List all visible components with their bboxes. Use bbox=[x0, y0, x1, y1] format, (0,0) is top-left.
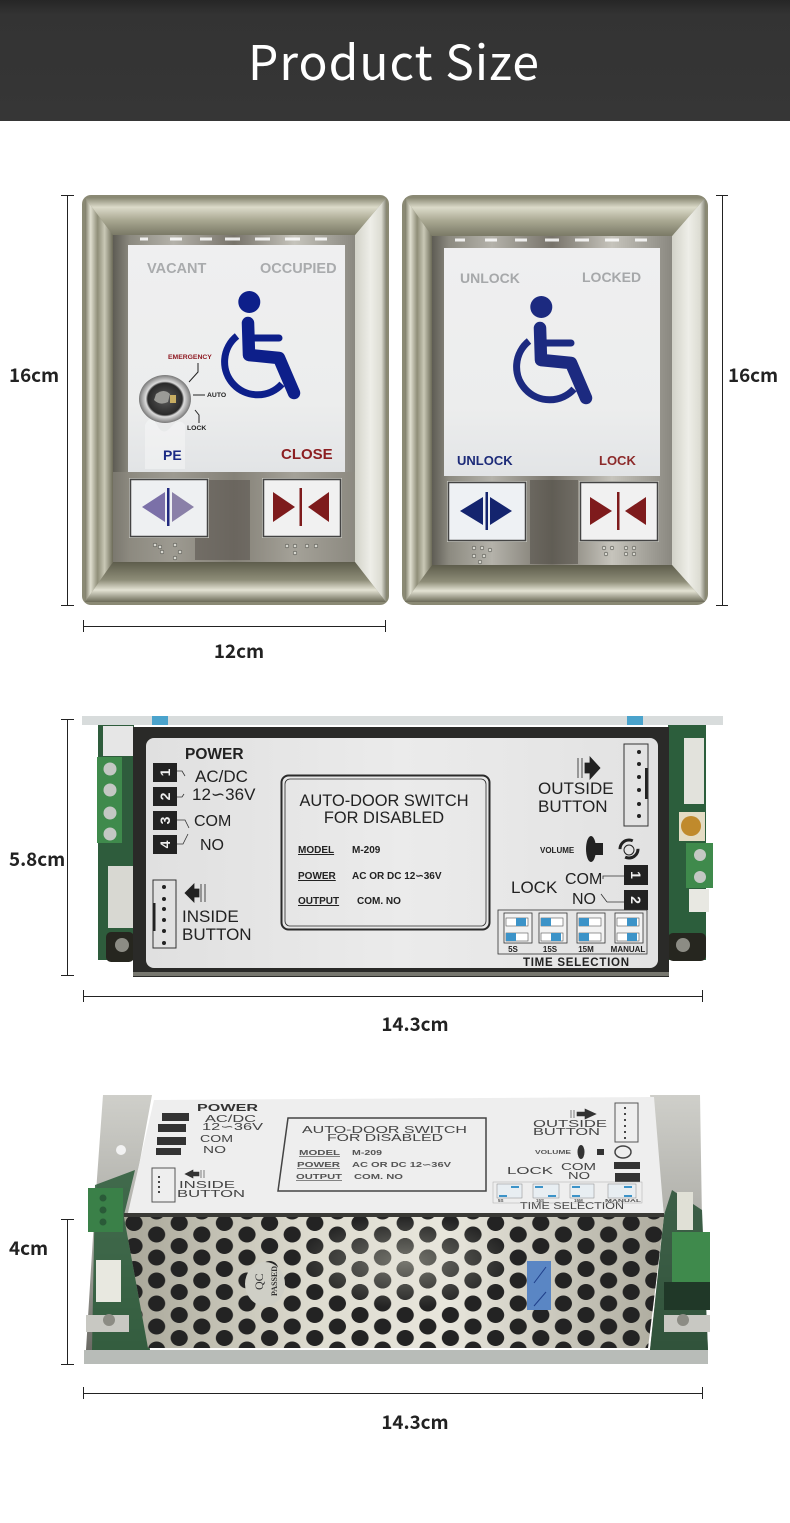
sticker: model box: OUTPUT bbox=[298, 896, 339, 907]
sticker text bbox=[152, 1103, 642, 1212]
sticker text: VOLUME bbox=[535, 1150, 572, 1156]
sticker text: NO bbox=[568, 1171, 590, 1182]
sticker: inside button connector: INSIDE bbox=[182, 907, 239, 926]
dimension: controller depth bbox=[61, 1219, 74, 1364]
dimension label: 16cm: 16cm bbox=[9, 361, 59, 388]
sticker: outside button connector: BUTTON bbox=[538, 797, 608, 816]
perforated metal cover bbox=[124, 1213, 664, 1348]
QC passed sticker: PASSED bbox=[270, 1266, 279, 1296]
sticker: model box: AUTO-DOOR SWITCH bbox=[299, 792, 469, 810]
label: UNLOCK blue: UNLOCK bbox=[457, 453, 513, 468]
blue label bbox=[527, 1261, 551, 1310]
sticker: power terminals: 4 bbox=[157, 840, 173, 848]
sticker: lock terminals: LOCK bbox=[511, 878, 558, 897]
sticker: lock terminals bbox=[511, 865, 648, 910]
dimension label: 4cm: 4cm bbox=[9, 1234, 48, 1261]
sticker text: POWER bbox=[297, 1162, 340, 1169]
dimension: controller width bbox=[83, 1387, 702, 1399]
sticker: inside button connector bbox=[153, 880, 252, 948]
sticker text: AC OR DC 12∽36V bbox=[352, 1162, 452, 1169]
label: EMERGENCY: EMERGENCY bbox=[168, 354, 212, 361]
label: VACANT: VACANT bbox=[147, 261, 206, 277]
sticker: power terminals: 3 bbox=[157, 816, 173, 824]
title: Product Size bbox=[248, 24, 540, 94]
button: close bbox=[262, 478, 342, 538]
sticker text: MANUAL bbox=[605, 1198, 641, 1203]
sticker: power terminals: 1 bbox=[157, 768, 173, 776]
label: LOCK red: LOCK bbox=[599, 453, 636, 468]
label: OCCUPIED: OCCUPIED bbox=[260, 261, 337, 277]
dimension: panel width bbox=[83, 620, 386, 632]
sticker: lock terminals: 1 bbox=[628, 871, 644, 879]
sticker: lock terminals: NO bbox=[572, 891, 596, 908]
sticker text: 5S bbox=[498, 1198, 504, 1203]
sticker text: MODEL bbox=[299, 1150, 341, 1157]
sticker text: OUTPUT bbox=[296, 1174, 343, 1181]
label: LOCKED: LOCKED bbox=[582, 269, 641, 285]
dimension label: 5.8cm: 5.8cm bbox=[9, 845, 65, 872]
icon: key lock bbox=[139, 354, 226, 432]
QC passed sticker: QC bbox=[252, 1273, 266, 1290]
sticker: power terminals: COM bbox=[194, 813, 231, 830]
button: lock bbox=[579, 481, 659, 542]
sticker: time selection switches: TIME SELECTION bbox=[523, 957, 629, 969]
label: AUTO: AUTO bbox=[207, 392, 226, 399]
photo: wall switch with key lock bbox=[82, 195, 389, 605]
braille dots bbox=[153, 543, 318, 560]
sticker: time selection switches: MANUAL bbox=[611, 945, 645, 954]
sticker text: INSIDE bbox=[179, 1180, 236, 1191]
sticker text: M-209 bbox=[352, 1150, 382, 1157]
sticker: outside button connector: OUTSIDE bbox=[538, 779, 614, 798]
dimension: controller height bbox=[61, 719, 74, 976]
sticker: lock terminals: COM bbox=[565, 871, 602, 888]
sticker text: AUTO-DOOR SWITCH bbox=[302, 1125, 467, 1136]
sticker: lock terminals: 2 bbox=[628, 896, 644, 904]
sticker: outside button connector bbox=[538, 744, 648, 826]
sticker: model box bbox=[282, 776, 490, 930]
sticker: time selection switches: 15S bbox=[543, 945, 558, 954]
sticker: power terminals: AC/DC bbox=[195, 767, 248, 786]
dimension label: 12cm: 12cm bbox=[214, 637, 264, 664]
sticker text: 15S bbox=[536, 1198, 544, 1203]
sticker text: NO bbox=[203, 1145, 226, 1156]
title banner bbox=[0, 0, 790, 121]
braille dots bbox=[472, 546, 636, 564]
dimension label: 14.3cm: 14.3cm bbox=[381, 1408, 449, 1435]
sticker: power terminals: 2 bbox=[157, 792, 173, 800]
label: UNLOCK: UNLOCK bbox=[460, 270, 520, 286]
sticker text: COM bbox=[561, 1162, 596, 1173]
sticker: time selection switches bbox=[498, 910, 647, 969]
dimension label: 16cm: 16cm bbox=[728, 361, 778, 388]
sticker: volume control: VOLUME bbox=[540, 846, 575, 855]
dimension: panel height right bbox=[716, 195, 728, 606]
sticker text: LOCK bbox=[507, 1166, 554, 1177]
dimension: panel height left bbox=[61, 195, 74, 606]
sticker: model box: COM. NO bbox=[357, 896, 401, 907]
label: LOCK: LOCK bbox=[187, 425, 206, 432]
sticker text: BUTTON bbox=[533, 1127, 600, 1138]
sticker text: 12∽36V bbox=[202, 1122, 264, 1133]
sticker text: FOR DISABLED bbox=[327, 1133, 443, 1144]
sticker: power terminals: 12∽36V bbox=[192, 785, 256, 804]
sticker text: AC/DC bbox=[205, 1114, 256, 1125]
label: CLOSE: CLOSE bbox=[281, 446, 333, 463]
dimension label: 14.3cm: 14.3cm bbox=[381, 1010, 449, 1037]
sticker: model box: AC OR DC 12∽36V bbox=[352, 871, 442, 882]
sticker: time selection switches: 15M bbox=[578, 945, 594, 954]
sticker: model box: POWER bbox=[298, 871, 337, 882]
dimension: controller width bbox=[83, 990, 702, 1002]
icon: wheelchair symbol bbox=[517, 296, 586, 400]
label: PE: PE bbox=[163, 447, 182, 463]
sticker text: COM bbox=[200, 1134, 233, 1145]
button: open bbox=[129, 478, 209, 538]
sticker text: COM. NO bbox=[354, 1174, 404, 1181]
sticker text: 15M bbox=[574, 1198, 583, 1203]
sticker: time selection switches: 5S bbox=[508, 945, 519, 954]
photo: controller box angled bbox=[84, 1095, 710, 1364]
sticker: inside button connector: BUTTON bbox=[182, 925, 252, 944]
sticker: power terminals: NO bbox=[200, 837, 224, 854]
sticker text: POWER bbox=[197, 1103, 259, 1114]
sticker: volume control bbox=[540, 836, 638, 862]
icon: wheelchair symbol bbox=[225, 291, 294, 395]
sticker text: TIME SELECTION bbox=[520, 1201, 624, 1212]
photo: wall switch without key bbox=[402, 195, 708, 605]
sticker text: BUTTON bbox=[177, 1189, 245, 1200]
sticker: model box: FOR DISABLED bbox=[324, 809, 444, 827]
QC passed sticker bbox=[245, 1262, 285, 1306]
photo: controller box front bbox=[82, 716, 723, 977]
button: unlock bbox=[447, 481, 527, 542]
heading: POWER: POWER bbox=[185, 746, 244, 763]
sticker: model box: M-209 bbox=[352, 845, 381, 856]
sticker text: OUTSIDE bbox=[533, 1119, 608, 1130]
sticker: power terminals bbox=[153, 746, 256, 854]
sticker: model box: MODEL bbox=[298, 845, 334, 856]
